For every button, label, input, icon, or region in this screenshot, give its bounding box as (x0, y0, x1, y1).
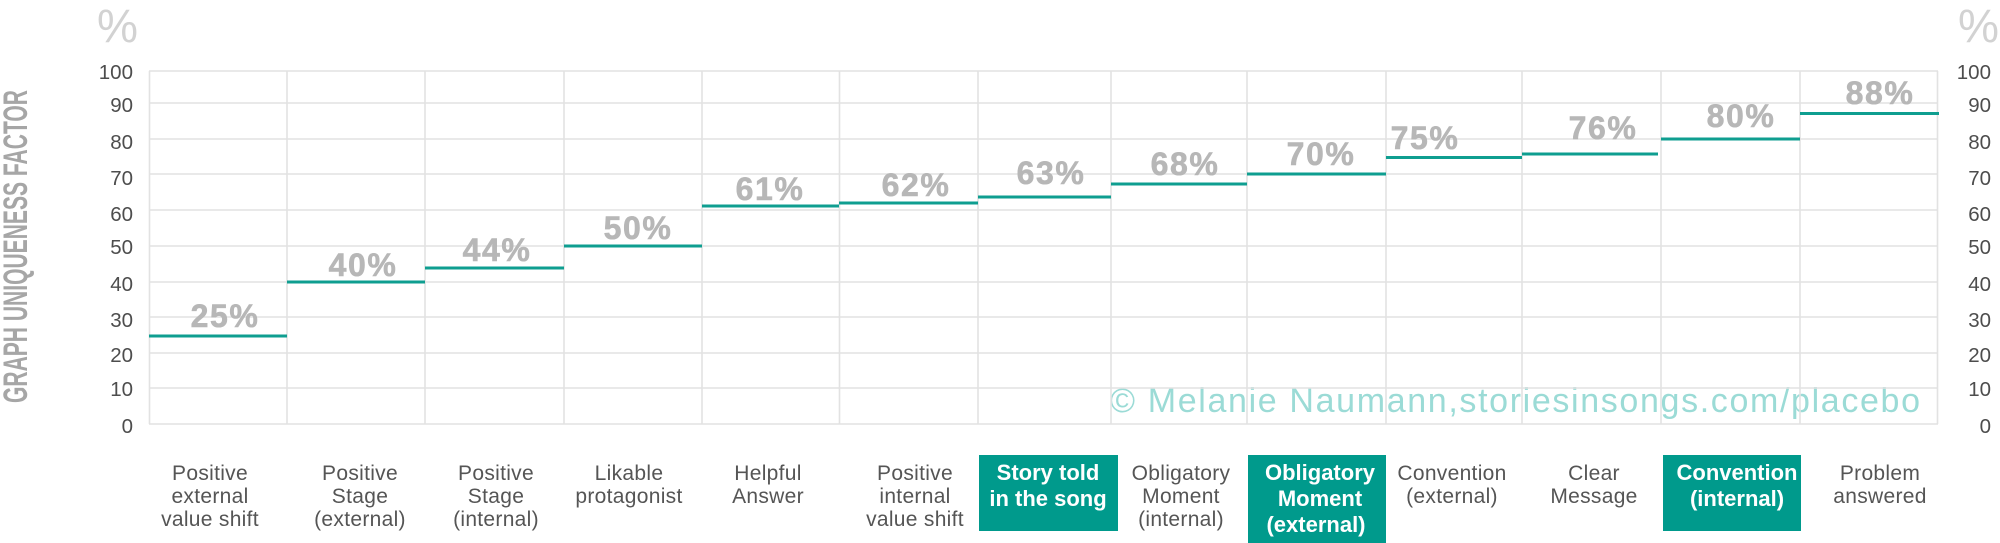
right y axis labels: 30 (1968, 309, 1991, 332)
left percent sign: % (97, 0, 138, 52)
left y axis labels: 50 (110, 236, 133, 259)
category labels: Positive (322, 462, 398, 485)
percentage value labels: 70% (1287, 136, 1355, 172)
left y axis labels: 80 (110, 131, 133, 154)
category labels: internal (879, 485, 951, 508)
right y axis labels: 80 (1968, 131, 1991, 154)
right y axis labels: 60 (1968, 203, 1991, 226)
category labels: (internal) (453, 508, 539, 531)
right y axis labels: 20 (1968, 344, 1991, 367)
left y axis labels: 40 (110, 273, 133, 296)
highlighted box: convention internal (1663, 455, 1801, 531)
category labels: Obligatory (1132, 462, 1231, 485)
highlighted box: story told in the song (979, 455, 1118, 531)
percentage value labels: 76% (1569, 110, 1637, 146)
left y axis labels: 10 (110, 378, 133, 401)
category labels: Answer (732, 485, 804, 508)
category labels: value shift (161, 508, 259, 531)
percentage value labels: 61% (736, 171, 804, 207)
copyright watermark: © Melanie Naumann,storiesinsongs.com/placebo (1110, 382, 1920, 420)
highlighted box: convention internal: Convention (1676, 460, 1798, 485)
right y axis labels: 90 (1968, 94, 1991, 117)
right y axis labels (1957, 61, 1991, 438)
right y axis labels: 0 (1980, 415, 1991, 438)
right y axis labels: 10 (1968, 378, 1991, 401)
right y axis labels: 40 (1968, 273, 1991, 296)
percentage value labels: 88% (1846, 75, 1914, 111)
category labels: (external) (1406, 485, 1498, 508)
percentage value labels: 80% (1707, 98, 1775, 134)
category labels: Positive (877, 462, 953, 485)
percentage value labels: 50% (604, 210, 672, 246)
category labels: Stage (332, 485, 388, 508)
left y axis labels (99, 61, 133, 438)
percentage value labels: 44% (463, 232, 531, 268)
right percent sign: % (1958, 0, 1999, 52)
percentage value labels (191, 75, 1914, 334)
category labels: Message (1550, 485, 1638, 508)
right y axis labels: 50 (1968, 236, 1991, 259)
category labels: answered (1833, 485, 1927, 508)
percentage value labels: 40% (329, 247, 397, 283)
highlighted box: story told in the song: in the song (989, 486, 1107, 511)
category labels (161, 462, 1927, 531)
highlighted box: obligatory moment external: Moment (1278, 486, 1363, 511)
left y axis labels: 20 (110, 344, 133, 367)
left y axis labels: 100 (99, 61, 133, 84)
highlighted box: convention internal: (internal) (1690, 486, 1784, 511)
category labels: Stage (468, 485, 524, 508)
category labels: protagonist (575, 485, 683, 508)
left y axis labels: 70 (110, 167, 133, 190)
left y axis labels: 0 (122, 415, 133, 438)
highlighted box: obligatory moment external (1248, 455, 1386, 543)
category labels: Convention (1397, 462, 1507, 485)
highlighted box: story told in the song: Story told (997, 460, 1099, 485)
percentage value labels: 68% (1151, 146, 1219, 182)
category labels: (external) (314, 508, 406, 531)
category labels: Positive (458, 462, 534, 485)
category labels: Problem (1840, 462, 1920, 485)
category labels: Moment (1142, 485, 1220, 508)
category labels: Helpful (734, 462, 802, 485)
highlighted box: obligatory moment external: Obligatory (1265, 460, 1376, 485)
category labels: Positive (172, 462, 248, 485)
percentage value labels: 62% (882, 167, 950, 203)
percentage value labels: 63% (1017, 155, 1085, 191)
category labels: Likable (595, 462, 663, 485)
percentage value labels: 25% (191, 298, 259, 334)
left y axis labels: 60 (110, 203, 133, 226)
right y axis labels: 70 (1968, 167, 1991, 190)
category labels: external (171, 485, 249, 508)
category labels: Clear (1568, 462, 1620, 485)
highlighted box: obligatory moment external: (external) (1266, 512, 1366, 537)
right y axis labels: 100 (1957, 61, 1991, 84)
left y axis labels: 90 (110, 94, 133, 117)
category labels: value shift (866, 508, 964, 531)
left y axis labels: 30 (110, 309, 133, 332)
category labels: (internal) (1138, 508, 1224, 531)
step line values (149, 114, 1939, 336)
chart grid (149, 71, 1938, 424)
percentage value labels: 75% (1391, 120, 1459, 156)
